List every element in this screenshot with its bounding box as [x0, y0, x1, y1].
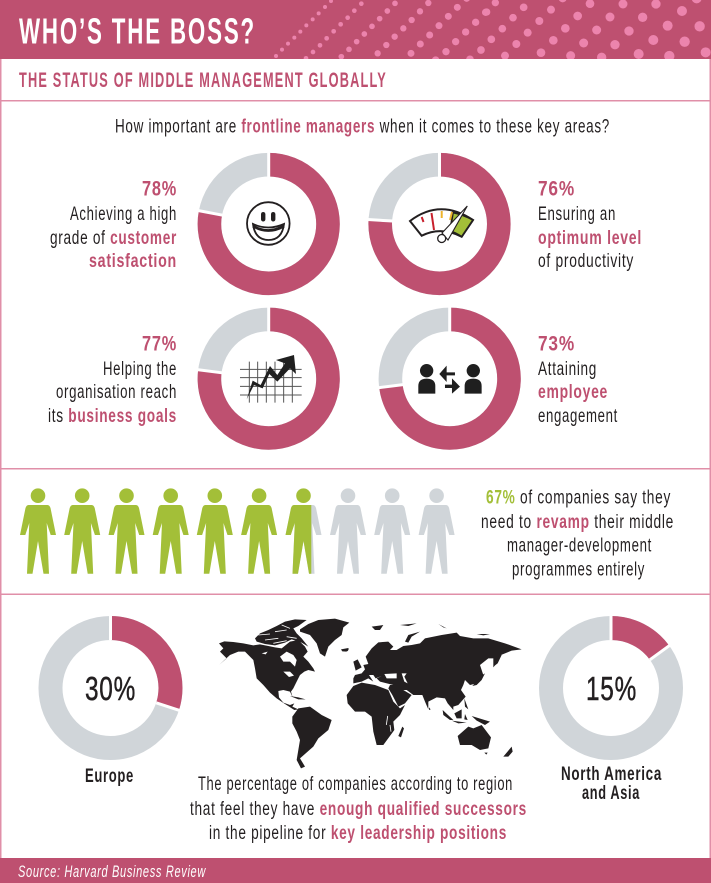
callout: 67%: need to revamp their middle — [481, 511, 674, 533]
donut: employee engagement 73% — [376, 305, 509, 438]
label: 73%: employee — [538, 381, 608, 403]
donut: business goals 77% — [195, 305, 328, 438]
map caption: that feel they have enough qualified successors — [190, 798, 527, 820]
footer bar — [0, 858, 711, 883]
label: 77% — [48, 332, 177, 427]
world map — [219, 619, 522, 768]
source: Source: Harvard Business Review — [18, 862, 206, 881]
label: 78% — [50, 177, 177, 272]
label: 76%: Ensuring an — [538, 203, 616, 225]
question: How important are frontline managers when it comes to these key areas? — [115, 116, 610, 138]
label: North America and Asia: and Asia — [582, 782, 640, 804]
label: 76%: of productivity — [538, 250, 634, 272]
label: North America and Asia — [561, 763, 662, 804]
callout: 67% — [481, 486, 674, 580]
icon: two people exchanging — [418, 364, 482, 394]
icon: gauge — [410, 206, 473, 242]
donut: customer satisfaction 78% — [196, 150, 328, 283]
label: Europe: Europe — [85, 765, 134, 787]
donut: Europe 30% — [50, 613, 182, 748]
label: 73%: Attaining — [538, 358, 597, 380]
value: 30%: 30% — [85, 670, 136, 707]
Americas and Greenland — [219, 619, 349, 768]
donut: North America and Asia 15% — [551, 613, 672, 748]
callout: 67%: programmes entirely — [512, 558, 645, 580]
pictogram: 67 percent of ten people — [20, 488, 455, 574]
icon: growth chart — [240, 355, 302, 403]
label: North America and Asia: North America — [561, 763, 662, 785]
label: 73%: engagement — [538, 405, 618, 427]
label: 76% — [538, 177, 642, 272]
label: 76%: optimum level — [538, 227, 642, 249]
label: 73% — [538, 332, 618, 427]
subtitle: THE STATUS OF MIDDLE MANAGEMENT GLOBALLY — [19, 68, 387, 92]
divider — [0, 594, 711, 595]
label: 76%: 76% — [538, 177, 575, 201]
label: 78%: satisfaction — [89, 250, 177, 272]
map caption: The percentage of companies according to region — [198, 773, 513, 795]
map caption: in the pipeline for key leadership positions — [209, 822, 507, 844]
Eurasia Africa Oceania — [346, 623, 522, 757]
label: 78%: Achieving a high — [70, 203, 177, 225]
dot pattern — [274, 0, 711, 64]
label: 77%: 77% — [142, 332, 177, 356]
label: 77%: organisation reach — [56, 381, 177, 403]
divider — [0, 468, 711, 470]
label: 78%: grade of customer — [50, 227, 177, 249]
value: 15%: 15% — [586, 670, 637, 707]
label: 73%: 73% — [538, 332, 575, 356]
map caption — [190, 773, 527, 844]
label: 78%: 78% — [142, 177, 177, 201]
title: WHO’S THE BOSS? — [19, 10, 256, 52]
divider — [0, 100, 711, 102]
icon: smiley — [247, 202, 290, 245]
label: 77%: its business goals — [48, 405, 177, 427]
header banner — [0, 0, 711, 64]
label: 77%: Helping the — [103, 358, 177, 380]
donut: productivity 76% — [366, 150, 499, 283]
